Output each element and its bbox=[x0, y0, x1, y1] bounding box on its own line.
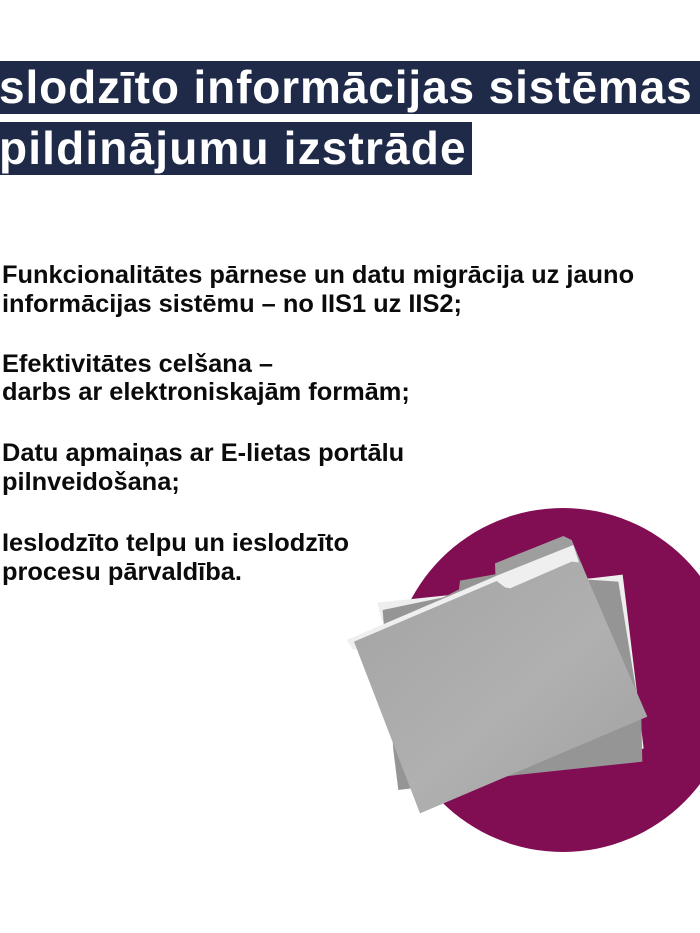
text block: functionality migration: Funkcionalitātes pārnese un datu migrācija uz jauno bbox=[2, 261, 634, 289]
front folder bbox=[354, 562, 647, 813]
magenta circle bbox=[391, 508, 700, 852]
back folder bbox=[383, 574, 642, 790]
text block: data exchange bbox=[2, 439, 404, 496]
back paper bbox=[377, 575, 644, 753]
text block: data exchange: pilnveidošana; bbox=[2, 468, 180, 496]
folder stack bbox=[347, 536, 647, 813]
front folder rear tab bbox=[495, 536, 588, 610]
text block: cell management bbox=[2, 529, 349, 586]
text block: cell management: Ieslodzīto telpu un ieslodzīto bbox=[2, 529, 349, 557]
text block: functionality migration bbox=[2, 261, 634, 318]
title banner line 1: slodzīto informācijas sistēmas bbox=[0, 61, 693, 113]
text block: efficiency: darbs ar elektroniskajām formām; bbox=[2, 378, 410, 406]
text block: efficiency bbox=[2, 350, 410, 406]
text block: cell management: procesu pārvaldība. bbox=[2, 558, 242, 586]
text block: data exchange: Datu apmaiņas ar E-lietas portālu bbox=[2, 439, 404, 467]
text block: efficiency: Efektivitātes celšana – bbox=[2, 350, 273, 378]
text block: functionality migration: informācijas sistēmu – no IIS1 uz IIS2; bbox=[2, 290, 462, 318]
white paper strip bbox=[347, 545, 579, 650]
title banner line 2: pildinājumu izstrāde bbox=[0, 122, 467, 174]
